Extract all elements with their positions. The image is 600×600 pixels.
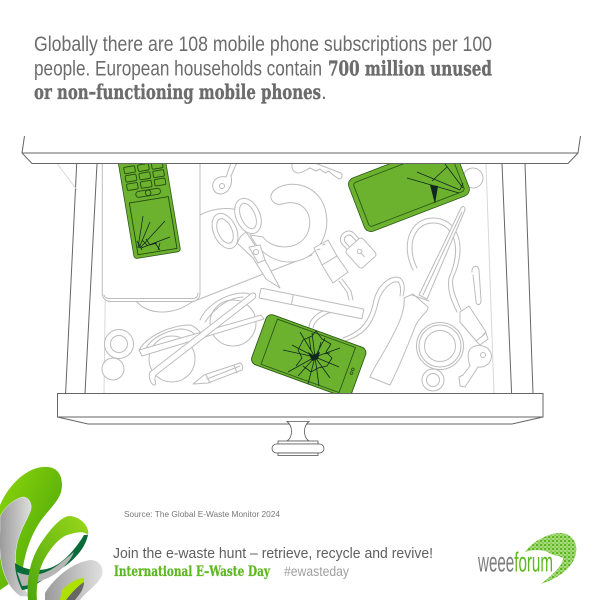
- drawer illustration: [22, 136, 580, 456]
- drawer top edge: [22, 136, 580, 164]
- phone keypad: [118, 164, 181, 259]
- rings left: [102, 330, 134, 380]
- hashtag: #ewasteday: [284, 564, 349, 579]
- headline: 700 million unused: [328, 56, 492, 80]
- usb cable: [309, 240, 404, 341]
- event name: International E–Waste Day: [114, 564, 271, 580]
- screen crack: [283, 331, 340, 386]
- phone top right: [348, 164, 470, 232]
- screen crack: [137, 216, 170, 250]
- ring small: [422, 369, 444, 391]
- headline: [34, 33, 492, 104]
- drawer knob: [272, 422, 324, 456]
- key bottom right: [459, 346, 491, 387]
- old phone outline: [102, 150, 200, 302]
- headline: people. European households contain: [34, 58, 322, 80]
- screen crack: [407, 164, 463, 204]
- drawer contents: [102, 164, 492, 393]
- screwdriver wire loop: [407, 218, 461, 312]
- drawer interior walls: [57, 164, 533, 394]
- tagline: Join the e-waste hunt – retrieve, recycle and revive!: [113, 545, 433, 562]
- padlock: [340, 230, 376, 268]
- phone bottom cracked: [250, 313, 368, 399]
- headline: or non–functioning mobile phones: [34, 80, 321, 104]
- paperclip: [472, 266, 481, 305]
- arc under phone: [136, 301, 192, 312]
- key top left: [212, 164, 237, 194]
- usb-c connector: [460, 306, 488, 345]
- wordmark: weeeforum: [477, 546, 553, 578]
- screwdriver: [370, 207, 465, 385]
- ring large: [416, 322, 464, 370]
- drawer front panel: [58, 394, 543, 424]
- headline: .: [321, 81, 327, 104]
- mat outline: [192, 209, 312, 302]
- key top centre: [291, 164, 342, 180]
- headline: Globally there are 108 mobile phone subscriptions per 100: [34, 33, 492, 56]
- leaf mark: [525, 533, 576, 584]
- pen: [259, 288, 364, 319]
- circle behind phone: [463, 168, 483, 188]
- source note: Source: The Global E-Waste Monitor 2024: [124, 509, 280, 519]
- glasses: [139, 293, 264, 385]
- weeeforum logo: [477, 533, 576, 584]
- scissors: [207, 194, 280, 288]
- c-shaped ring: [250, 184, 327, 262]
- swirl logo: [0, 467, 102, 600]
- pencil: [193, 363, 243, 384]
